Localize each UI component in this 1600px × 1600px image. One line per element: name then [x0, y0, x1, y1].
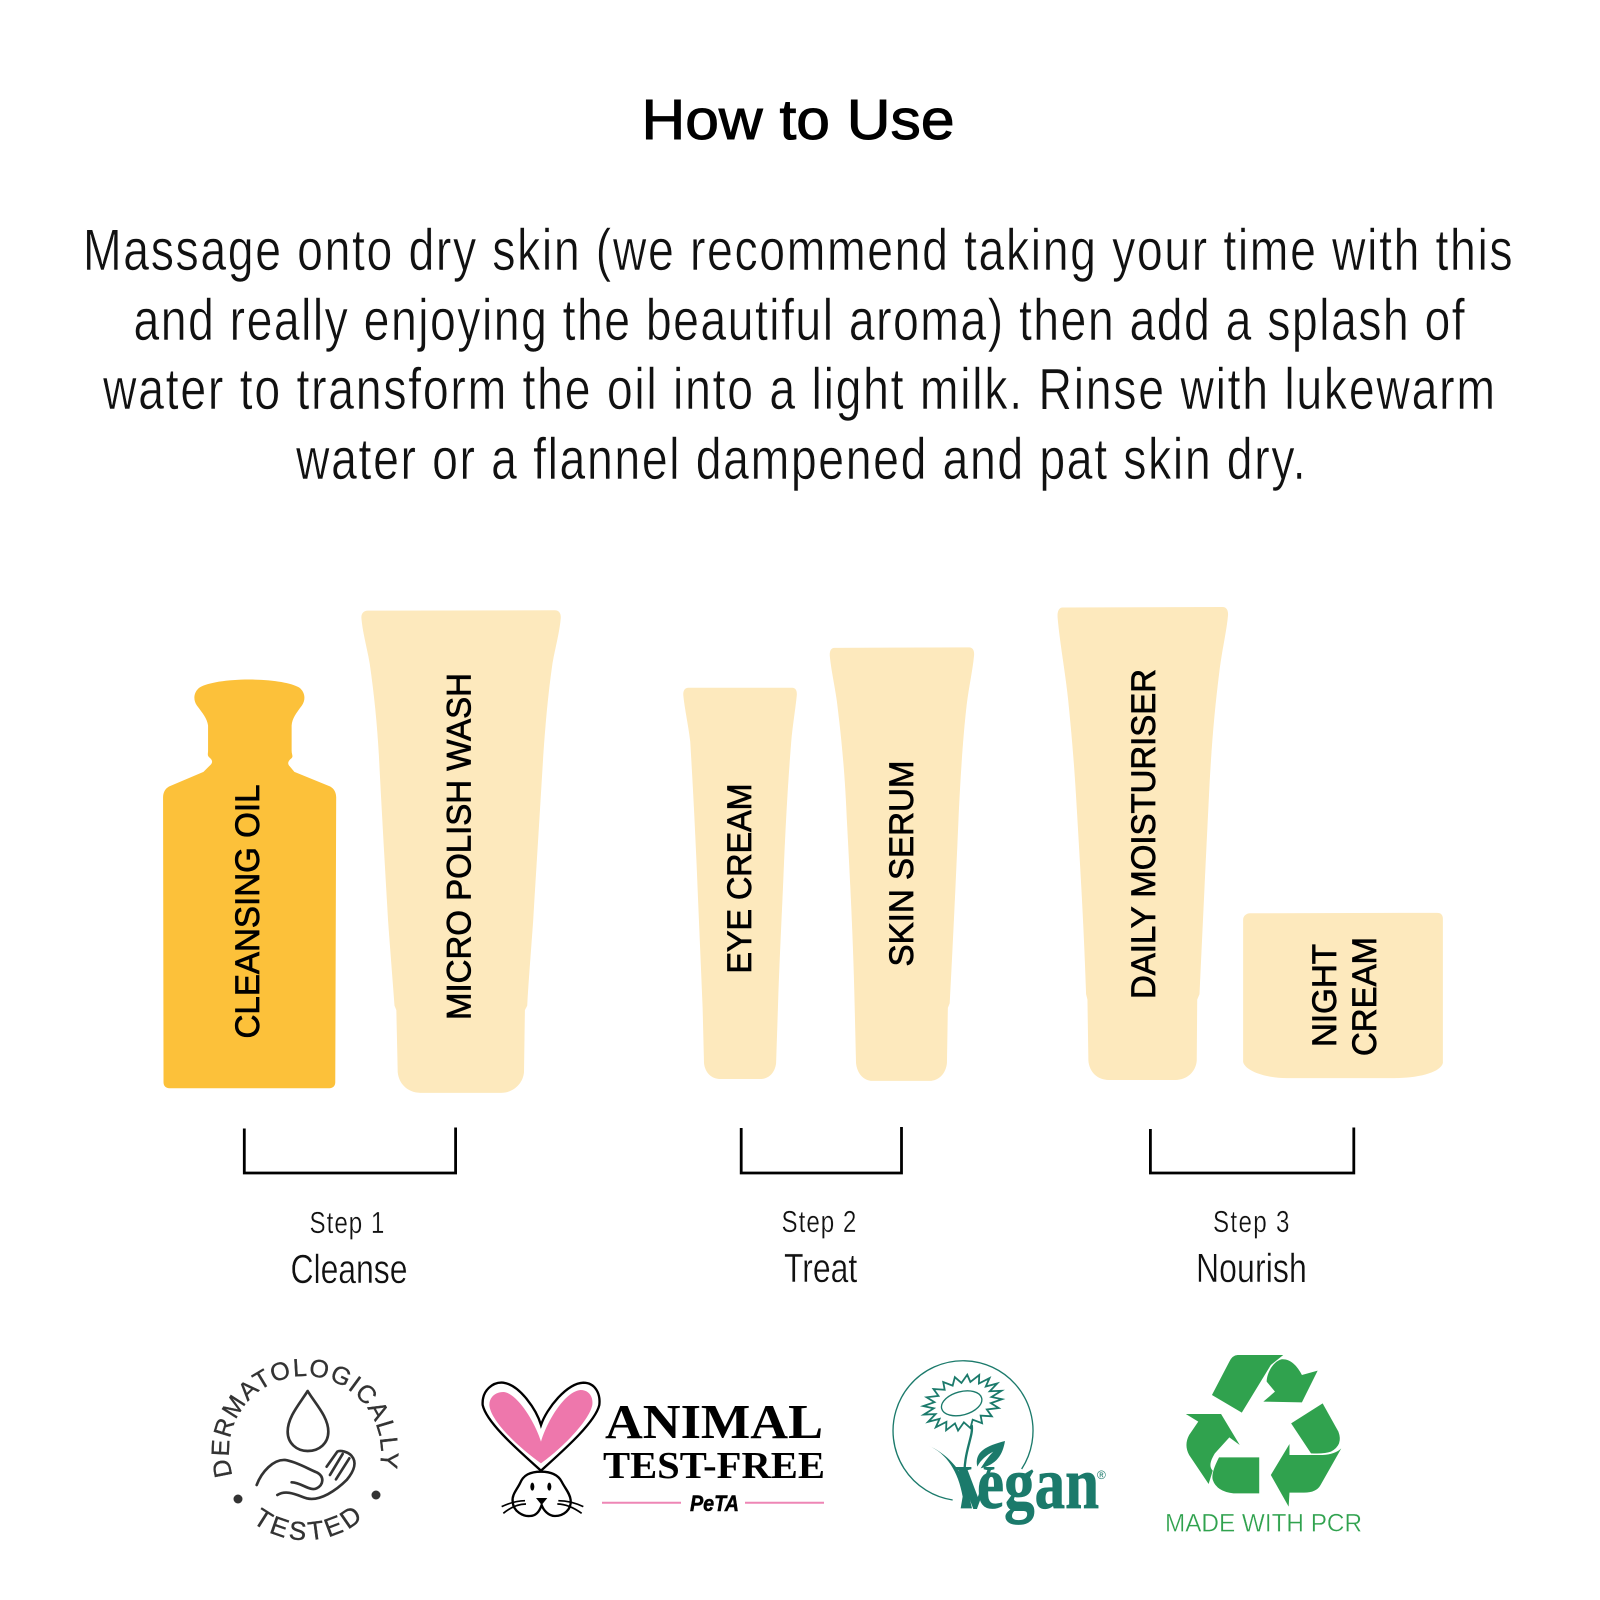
step 3 caption [1196, 1204, 1307, 1291]
product: eye cream tube [683, 688, 797, 1079]
badge: PETA animal test-free [483, 1383, 825, 1516]
title: How to Use [642, 88, 954, 152]
step 1 caption: Step 1 [310, 1205, 384, 1240]
badge: dermatologically tested [211, 1359, 399, 1540]
product: eye cream tube: EYE CREAM [721, 784, 759, 974]
step 3 caption: Nourish [1196, 1245, 1307, 1291]
product: cleansing oil bottle: CLEANSING OIL [229, 784, 267, 1038]
step 2 caption [782, 1204, 857, 1291]
product: skin serum tube: SKIN SERUM [883, 760, 921, 966]
bracket: step 1 [244, 1128, 456, 1173]
badge: vegan [893, 1361, 1106, 1525]
badge: dermatologically tested: DERMATOLOGICALLY [211, 1359, 399, 1478]
badge: made with PCR recycle: MADE WITH PCR [1165, 1510, 1362, 1538]
product: daily moisturiser tube [1058, 607, 1228, 1080]
instructions text block: and really enjoying the beautiful aroma) then add a splash of [134, 288, 1465, 353]
product: skin serum tube [830, 647, 974, 1081]
icon: recycle arrows [1186, 1355, 1341, 1507]
badge: PETA animal test-free: ANIMAL [605, 1394, 823, 1449]
badge: vegan: V [955, 1454, 995, 1522]
badge: dermatologically tested: TESTED [257, 1507, 360, 1540]
product: micro polish wash tube [361, 610, 561, 1093]
badge: PETA animal test-free: TEST-FREE [603, 1445, 825, 1487]
instructions text block: water or a flannel dampened and pat skin dry. [295, 427, 1306, 492]
badge: vegan: egan [977, 1443, 1099, 1525]
step 1 caption: Cleanse [290, 1246, 407, 1292]
product: night cream jar: NIGHT [1306, 944, 1344, 1047]
badge: PETA animal test-free: PeTA [690, 1491, 739, 1516]
step 2 caption: Step 2 [782, 1204, 856, 1239]
step 1 caption [290, 1205, 408, 1292]
badge: made with PCR recycle [1165, 1355, 1362, 1538]
instructions text block: water to transform the oil into a light milk. Rinse with lukewarm [102, 357, 1495, 422]
product: micro polish wash tube: MICRO POLISH WASH [440, 673, 478, 1020]
badge: vegan: ® [1097, 1468, 1106, 1482]
instructions text block [83, 218, 1513, 492]
product: night cream jar [1243, 913, 1443, 1078]
product: cleansing oil bottle [163, 680, 336, 1088]
product: night cream jar: CREAM [1346, 937, 1384, 1056]
step 3 caption: Step 3 [1213, 1204, 1289, 1239]
icon: bunny [483, 1383, 600, 1516]
instructions text block: Massage onto dry skin (we recommend taking your time with this [83, 218, 1513, 283]
bracket: step 3 [1150, 1128, 1354, 1173]
bracket: step 2 [741, 1127, 902, 1173]
step 2 caption: Treat [784, 1245, 857, 1291]
product: daily moisturiser tube: DAILY MOISTURISER [1125, 669, 1163, 999]
